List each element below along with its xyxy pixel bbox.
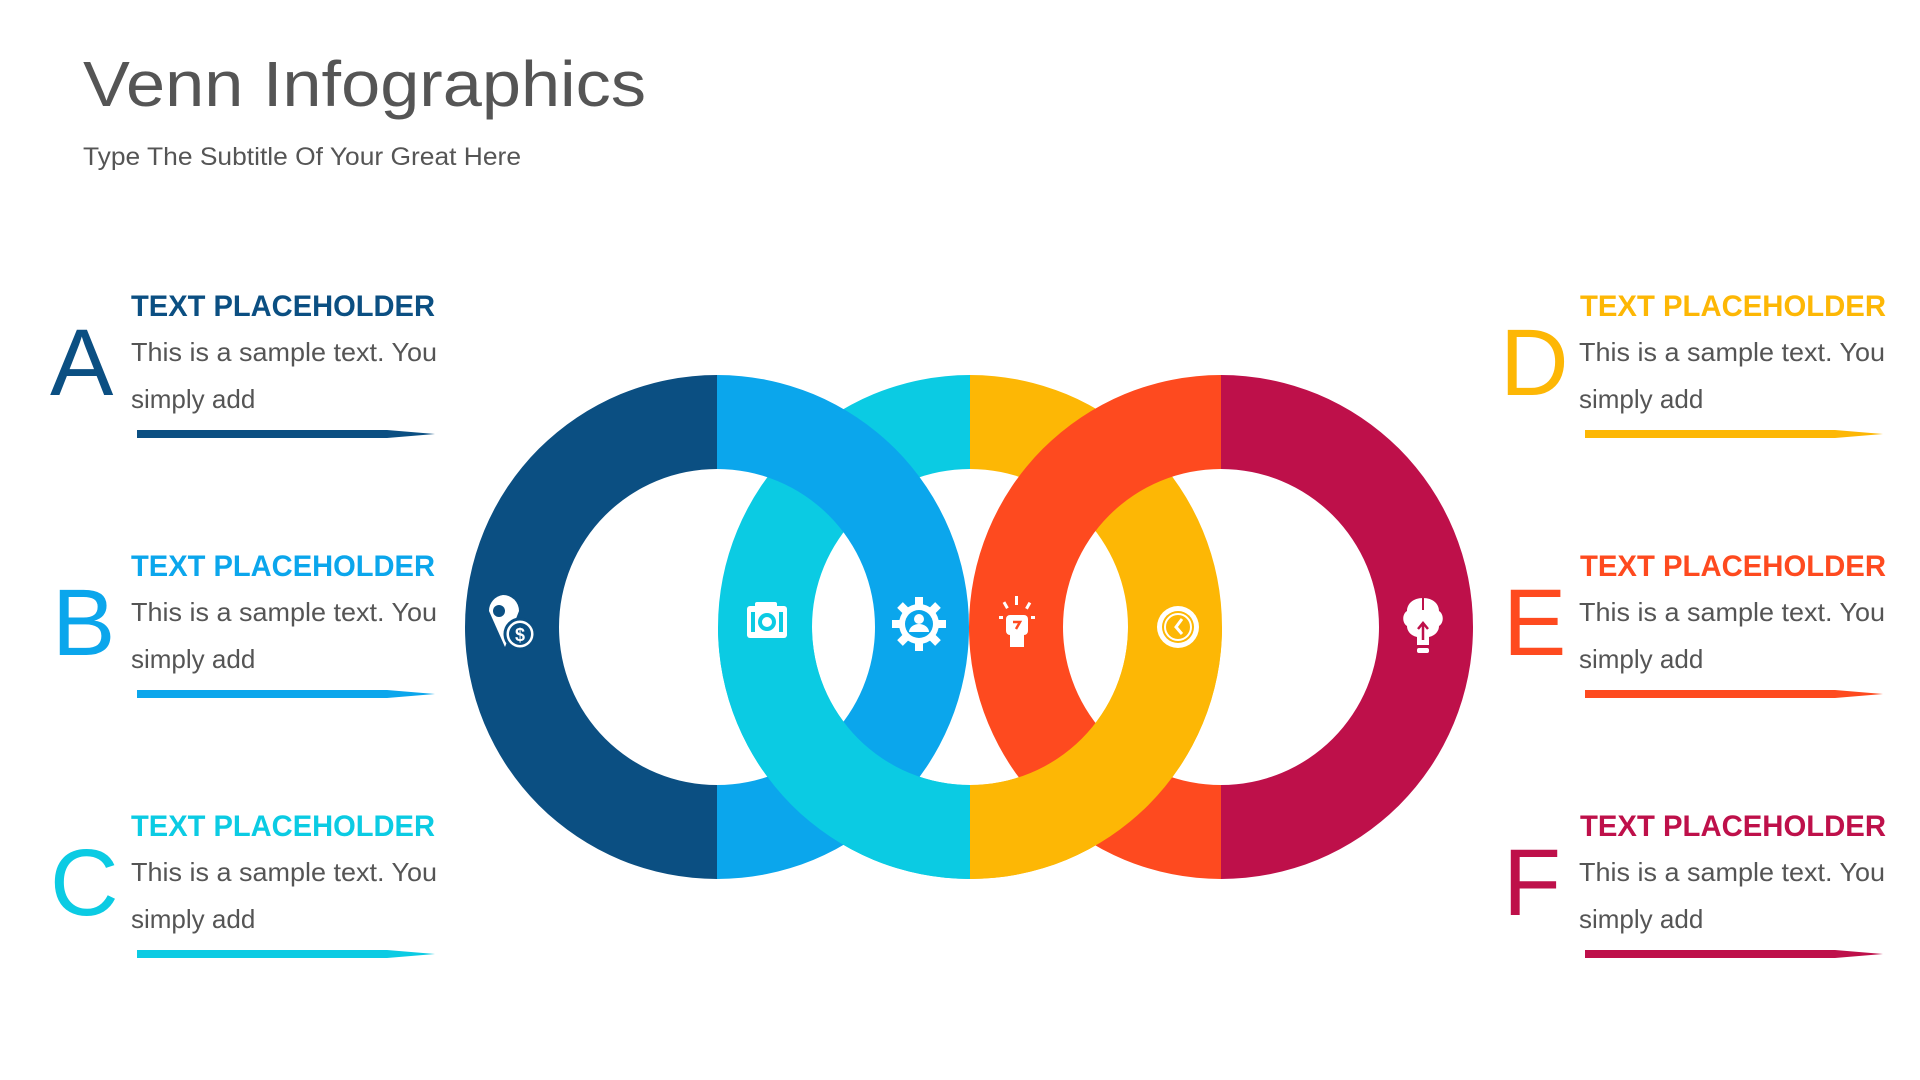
panel: B bbox=[52, 550, 437, 698]
letter D: D bbox=[1500, 310, 1569, 416]
bar E bbox=[1585, 690, 1883, 698]
body D: simply add bbox=[1579, 384, 1703, 414]
icon: camera bbox=[747, 602, 787, 638]
heading D: TEXT PLACEHOLDER bbox=[1580, 290, 1886, 323]
panel: F bbox=[1503, 810, 1886, 958]
body C: simply add bbox=[131, 904, 255, 934]
bar D bbox=[1585, 430, 1883, 438]
bar A bbox=[137, 430, 435, 438]
body E: This is a sample text. You bbox=[1579, 597, 1885, 627]
body B: simply add bbox=[131, 644, 255, 674]
letter B: B bbox=[52, 570, 115, 676]
heading B: TEXT PLACEHOLDER bbox=[131, 550, 435, 583]
body F: simply add bbox=[1579, 904, 1703, 934]
venn rings bbox=[465, 375, 1473, 879]
panel: A bbox=[50, 290, 437, 438]
icon: fist bbox=[999, 596, 1035, 647]
letter F: F bbox=[1503, 830, 1561, 936]
icon: gear user bbox=[892, 597, 946, 651]
letter A: A bbox=[50, 310, 114, 416]
icon: location dollar bbox=[489, 595, 535, 649]
body E: simply add bbox=[1579, 644, 1703, 674]
body F: This is a sample text. You bbox=[1579, 857, 1885, 887]
heading E: TEXT PLACEHOLDER bbox=[1580, 550, 1886, 583]
body A: This is a sample text. You bbox=[131, 337, 437, 367]
body B: This is a sample text. You bbox=[131, 597, 437, 627]
ring 2 bottom interlock bbox=[718, 628, 1222, 879]
ring 2 (cyan/yellow) bbox=[718, 375, 1222, 879]
heading A: TEXT PLACEHOLDER bbox=[131, 290, 435, 323]
heading C: TEXT PLACEHOLDER bbox=[131, 810, 435, 843]
heading F: TEXT PLACEHOLDER bbox=[1580, 810, 1886, 843]
body A: simply add bbox=[131, 384, 255, 414]
body D: This is a sample text. You bbox=[1579, 337, 1885, 367]
title: Venn Infographics bbox=[83, 48, 646, 120]
panel: D bbox=[1500, 290, 1886, 438]
ring 3 (orange/crimson) bbox=[969, 375, 1473, 879]
panel: E bbox=[1503, 550, 1886, 698]
panel: C bbox=[50, 810, 437, 958]
subtitle: Type The Subtitle Of Your Great Here bbox=[83, 143, 521, 171]
ring 1 (dark blue/light blue) bbox=[465, 375, 969, 879]
letter E: E bbox=[1503, 570, 1566, 676]
bar F bbox=[1585, 950, 1883, 958]
icon: location dollar: $ bbox=[515, 625, 525, 645]
icon: brain bulb bbox=[1403, 598, 1443, 653]
letter C: C bbox=[50, 830, 119, 936]
icon: clock bbox=[1157, 606, 1199, 648]
body C: This is a sample text. You bbox=[131, 857, 437, 887]
bar B bbox=[137, 690, 435, 698]
bar C bbox=[137, 950, 435, 958]
